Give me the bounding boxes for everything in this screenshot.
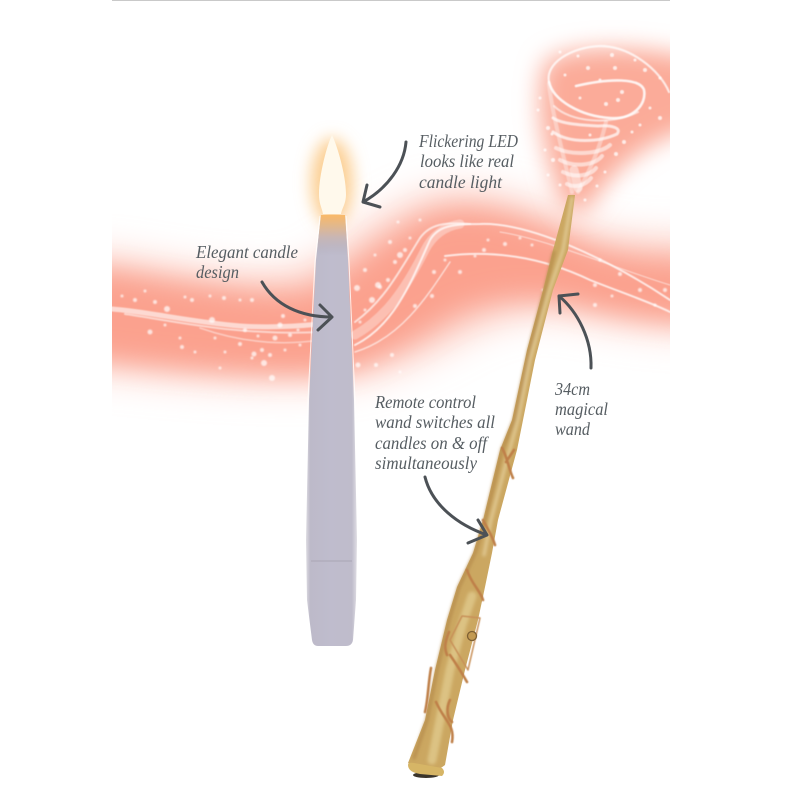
callout text: elegant design: Elegant candle <box>195 242 298 262</box>
callout text: flickering LED <box>418 131 518 192</box>
callout text: remote control: simultaneously <box>375 453 477 473</box>
callout text: elegant design <box>195 242 298 282</box>
callout text: flickering LED: looks like real <box>420 151 514 171</box>
arrow to wand grip <box>425 477 487 543</box>
callout text: magical wand: magical <box>555 399 608 419</box>
candle edge highlights <box>305 216 358 540</box>
callout text: magical wand: 34cm <box>554 379 590 399</box>
arrow to wand shaft <box>559 294 591 368</box>
callout text: remote control <box>374 392 495 473</box>
infographic canvas <box>112 0 670 778</box>
callout: remote control <box>374 392 495 543</box>
candle top glow <box>309 215 354 400</box>
callout text: remote control: Remote control <box>374 392 476 412</box>
sparkles of the band <box>120 218 667 381</box>
callout text: remote control: wand switches all <box>375 412 495 432</box>
candle body <box>306 215 357 646</box>
white streaks of the band <box>112 223 670 352</box>
wand end cap <box>408 763 444 776</box>
wand <box>408 195 575 778</box>
tornado spiral <box>549 46 669 192</box>
wand shaft shading <box>414 198 572 760</box>
top rule <box>112 0 670 1</box>
candle <box>305 135 358 646</box>
pink tornado glow <box>540 48 700 210</box>
pink horizontal band <box>70 212 700 371</box>
arrow to flame <box>363 142 406 207</box>
callout text: magical wand <box>554 379 608 439</box>
candle flame glow <box>311 138 353 226</box>
sparkles of the tornado <box>536 50 662 202</box>
arrow to candle body <box>262 282 332 330</box>
callout: magical wand <box>554 294 608 439</box>
wand shaft <box>408 195 575 771</box>
wand button <box>468 632 476 640</box>
callout text: magical wand: wand <box>555 419 590 439</box>
callout: elegant design <box>195 242 332 330</box>
wand end base <box>413 772 439 778</box>
callout text: flickering LED: Flickering LED <box>418 131 518 151</box>
pale outer band glow <box>60 193 720 382</box>
callout: flickering LED <box>363 131 518 207</box>
pink magic swirl background <box>60 46 720 382</box>
callout text: remote control: candles on & off <box>375 433 489 453</box>
callout text: flickering LED: candle light <box>419 172 503 192</box>
candle base seam <box>311 560 352 562</box>
candle flame <box>319 135 346 214</box>
wand vine carvings <box>425 448 514 742</box>
callout text: elegant design: design <box>196 262 239 282</box>
